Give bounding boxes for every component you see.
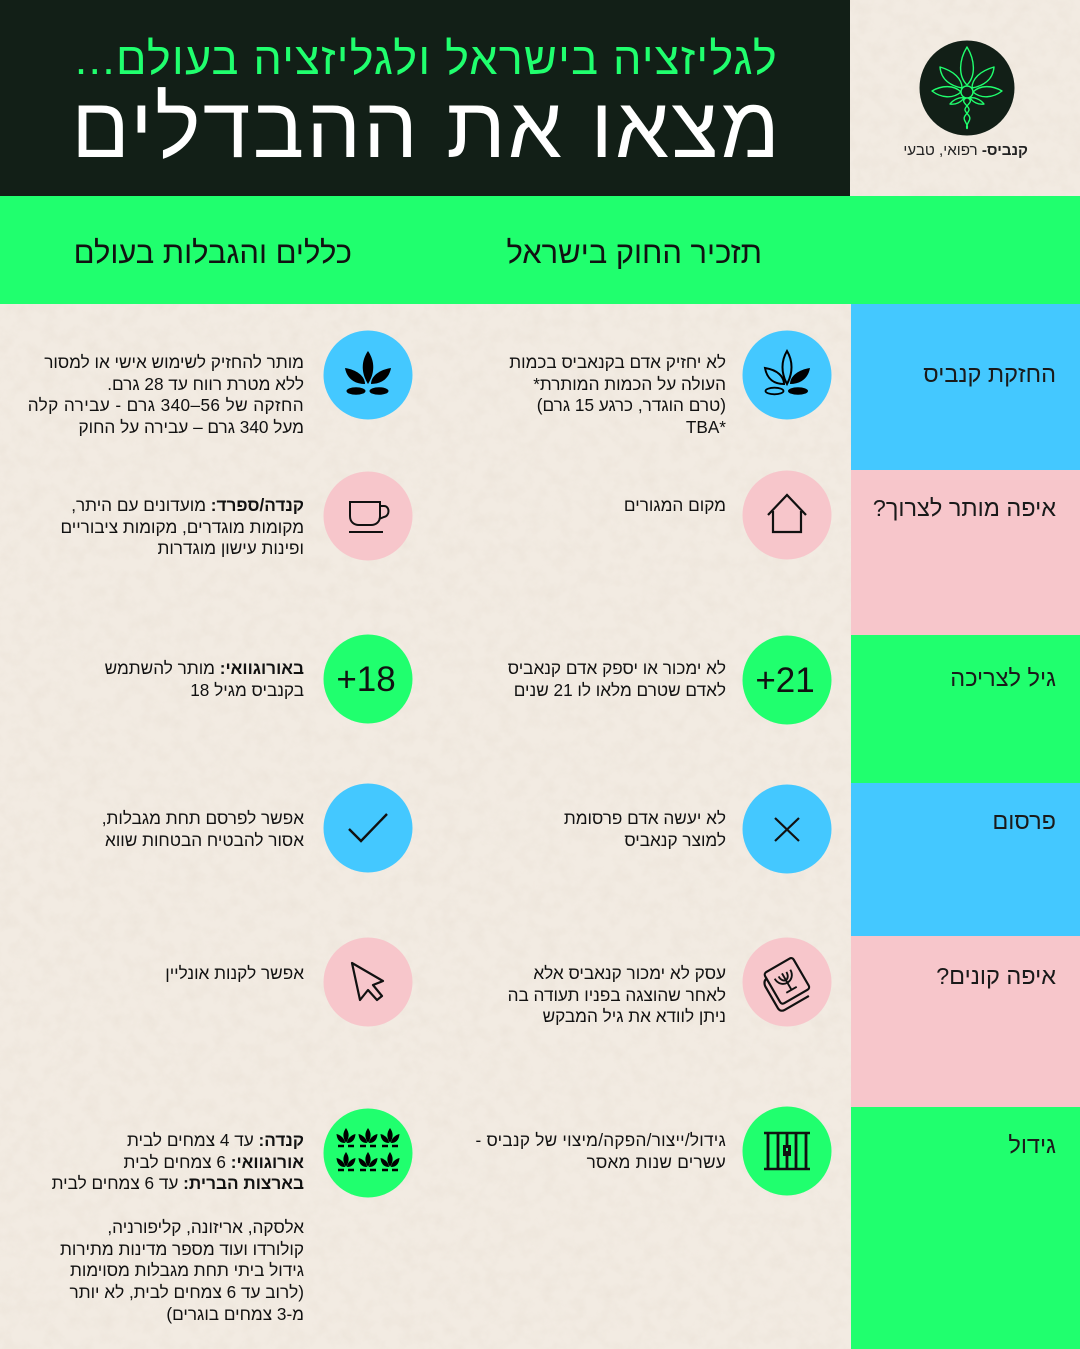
icon: cannabis outline, Israel possession xyxy=(742,330,832,420)
text: Israel cultivation xyxy=(475,1130,726,1172)
category: age xyxy=(851,635,1080,783)
text: Israel age: לא ימכור או יספק אדם קנאביס xyxy=(508,658,726,678)
text: Israel age: לאדם שטרם מלאו לו 21 שנים xyxy=(514,680,726,700)
text: Israel purchase xyxy=(508,963,726,1026)
text: world possession: מותר להחזיק לשימוש אישי או למסור xyxy=(44,352,304,372)
category: age: גיל לצריכה xyxy=(950,665,1056,691)
text: Israel possession: *TBA xyxy=(686,417,726,437)
logo xyxy=(903,40,1028,159)
text: world consumption xyxy=(60,495,304,558)
text: world cultivation: בארצות הברית: עד 6 צמחים לבית xyxy=(52,1173,304,1193)
heading: Israel: תזכיר החוק בישראל xyxy=(507,235,762,270)
icon: age 21: +21 xyxy=(755,661,815,700)
category: where to consume xyxy=(851,470,1080,635)
heading: world: כללים והגבלות בעולם xyxy=(74,235,352,270)
text: Israel possession: לא יחזיק אדם בקנאביס בכמות xyxy=(509,352,726,372)
text: Israel possession: העולה על הכמות המותרת* xyxy=(533,374,726,394)
text: world possession xyxy=(28,352,304,437)
icon: house xyxy=(742,470,832,560)
icon: age 21 xyxy=(742,636,832,724)
text: world cultivation: קולורדו ועוד מספר מדינות מתירות xyxy=(60,1239,304,1259)
text: world advertising xyxy=(102,808,304,850)
text: world cultivation xyxy=(52,1130,304,1324)
text: Israel advertising xyxy=(564,808,726,850)
text: world age: באורוגוואי: מותר להשתמש xyxy=(105,658,304,678)
logo emblem xyxy=(920,40,1014,136)
icon: cursor xyxy=(324,938,412,1026)
icon: cross xyxy=(742,784,832,874)
column headings band xyxy=(0,196,1080,304)
text: world cultivation: קנדה: עד 4 צמחים לבית xyxy=(127,1130,304,1150)
category: advertising: פרסום xyxy=(992,808,1056,834)
header panel xyxy=(0,0,850,196)
text: Israel purchase: ניתן לוודא את גיל המבקש xyxy=(543,1006,726,1026)
text: Israel possession xyxy=(509,352,726,437)
text: Israel purchase: לאחר שהוצגה בפניו תעודה בה xyxy=(508,985,726,1005)
text: world cultivation: אלסקה, אריזונה, קליפורניה, xyxy=(107,1217,304,1237)
text: Israel advertising: למוצר קנאביס xyxy=(624,830,726,850)
icon: prison bars xyxy=(742,1106,832,1196)
icon: check xyxy=(324,784,412,872)
category: possession xyxy=(851,304,1080,470)
text: world possession: מעל 340 גרם – עבירה על החוק xyxy=(79,417,304,437)
icon: coffee cup xyxy=(324,472,412,560)
text: world advertising: אסור להבטיח הבטחות שווא xyxy=(105,830,304,850)
text: world possession: החזקה של 56–340 גרם - עבירה קלה xyxy=(28,395,304,415)
category: where to buy: איפה קונים? xyxy=(936,963,1056,989)
text: Israel purchase: עסק לא ימכור קנאביס אלא xyxy=(533,963,726,983)
text: world purchase: אפשר לקנות אונליין xyxy=(165,963,304,983)
text: world consumption: מקומות מוגדרים, מקומות ציבוריים xyxy=(60,517,304,537)
icon: cannabis solid, world possession xyxy=(324,330,412,420)
text: Israel consumption: מקום המגורים xyxy=(624,495,726,515)
text: Israel cultivation: גידול/ייצור/הפקה/מיצוי של קנביס - xyxy=(475,1130,726,1150)
text: world advertising: אפשר לפרסם תחת מגבלות, xyxy=(102,808,304,828)
title: מצאו את ההבדלים xyxy=(71,80,782,176)
category: where to buy xyxy=(851,936,1080,1107)
text: world cultivation: מ-3 צמחים בוגרים) xyxy=(166,1304,304,1324)
category: where to consume: איפה מותר לצרוך? xyxy=(873,495,1056,521)
text: world possession: ללא מטרת רווח עד 28 גרם. xyxy=(107,374,304,394)
category: possession: החזקת קנביס xyxy=(923,361,1056,387)
subtitle: לגליזציה בישראל ולגליזציה בעולם... xyxy=(75,33,778,84)
text: world cultivation: (לרוב עד 6 צמחים לבית, לא יותר xyxy=(70,1282,304,1302)
text: world age xyxy=(105,658,304,700)
logo caption: קנביס- רפואי, טבעי xyxy=(903,142,1028,159)
text: Israel age xyxy=(508,658,726,700)
text: world cultivation: גידול ביתי תחת מגבלות מסוימות xyxy=(70,1260,304,1280)
text: Israel possession: (טרם הוגדר, כרגע 15 גרם) xyxy=(537,395,726,415)
category: cultivation xyxy=(851,1107,1080,1349)
category: cultivation: גידול xyxy=(1008,1132,1056,1158)
text: world age: בקנביס מגיל 18 xyxy=(190,680,304,700)
icon: ID booklet xyxy=(742,938,832,1026)
text: Israel cultivation: עשרים שנות מאסר xyxy=(587,1152,726,1172)
icon: age 18 xyxy=(324,634,412,724)
icon: rows of plants xyxy=(324,1108,412,1198)
text: Israel advertising: לא יעשה אדם פרסומת xyxy=(564,808,726,828)
text: world consumption: קנדה/ספרד: מועדונים עם היתר, xyxy=(71,495,304,515)
text: world consumption: ופינות עישון מוגדרות xyxy=(157,538,304,558)
text: world cultivation: אורוגוואי: 6 צמחים לבית xyxy=(124,1152,304,1172)
icon: age 18: +18 xyxy=(336,660,396,699)
category: advertising xyxy=(851,783,1080,936)
